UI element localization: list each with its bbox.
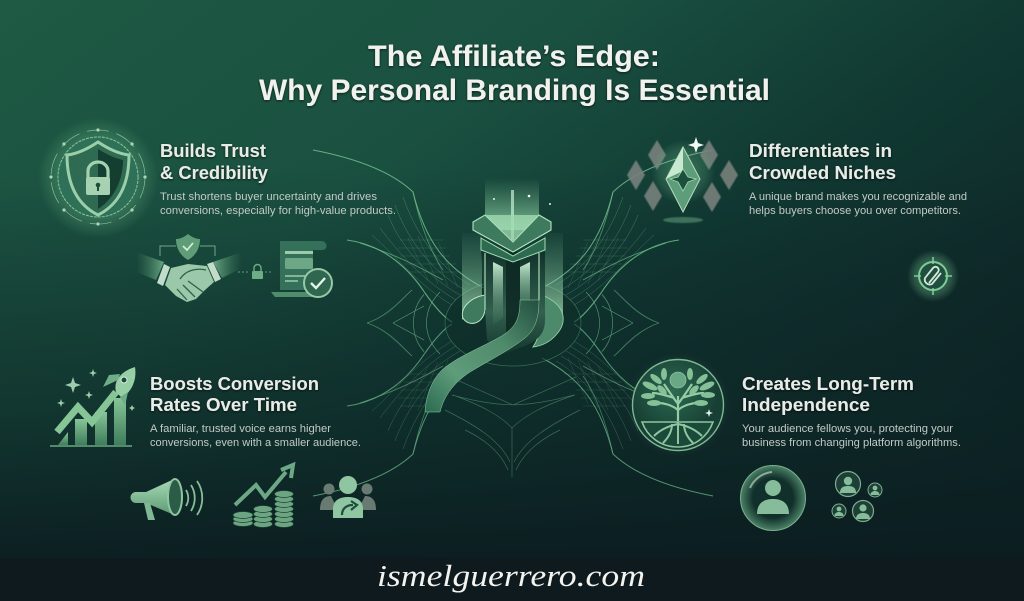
central pillar emblem <box>425 178 563 412</box>
icon: audience bubbles <box>832 472 882 522</box>
icon: coins and arrow <box>233 465 294 528</box>
panel: long-term independence: Independence <box>742 395 870 415</box>
light beam <box>485 178 539 230</box>
icon: diamonds <box>627 137 738 223</box>
icon: audience with arrow <box>320 476 376 518</box>
icon: receipt with check <box>271 241 332 297</box>
panel: long-term independence <box>626 353 961 530</box>
panel: differentiates <box>627 137 967 302</box>
panel: builds trust: conversions, especially for high-value products. <box>160 205 396 217</box>
body text: Trust shortens buyer uncertainty and drives <box>160 191 378 203</box>
panel: builds trust: & Credibility <box>160 163 268 183</box>
column <box>481 248 545 355</box>
title <box>259 40 770 107</box>
icon: rocket and bar chart <box>50 367 135 446</box>
title: The Affiliate’s Edge: <box>368 40 660 73</box>
icon: person bubble <box>740 466 806 530</box>
icon: link target <box>907 250 959 302</box>
footer website: ismelguerrero.com <box>377 558 645 593</box>
heading: Boosts Conversion <box>150 374 319 394</box>
title: Why Personal Branding Is Essential <box>259 74 770 107</box>
heading: Differentiates in <box>749 141 892 161</box>
panel: boosts conversion <box>50 367 376 528</box>
heading: Builds Trust <box>160 141 266 161</box>
panel: differentiates: helps buyers choose you over competitors. <box>749 205 961 217</box>
panel: builds trust <box>38 118 396 302</box>
icon: small lock <box>238 265 272 279</box>
heading: Creates Long-Term <box>742 374 914 394</box>
panel: differentiates: Crowded Niches <box>749 163 896 183</box>
panel: boosts conversion: Rates Over Time <box>150 395 297 415</box>
body text: A familiar, trusted voice earns higher <box>150 423 331 435</box>
left hook <box>462 295 485 323</box>
body text: A unique brand makes you recognizable and <box>749 191 967 203</box>
central flowing mesh lines <box>313 150 713 496</box>
icon: shield with lock <box>38 118 158 238</box>
side beams <box>462 233 482 320</box>
icon: handshake with shield <box>136 234 242 302</box>
ribbon <box>425 300 539 412</box>
right crescent <box>533 295 563 347</box>
icon: tree in circle <box>626 353 730 457</box>
capital <box>481 238 545 262</box>
icon: megaphone <box>130 479 202 520</box>
body text: Your audience fellows you, protecting your <box>742 423 953 435</box>
panel: boosts conversion: conversions, even with a smaller audience. <box>150 437 361 449</box>
panel: long-term independence: business from changing platform algorithms. <box>742 437 961 449</box>
